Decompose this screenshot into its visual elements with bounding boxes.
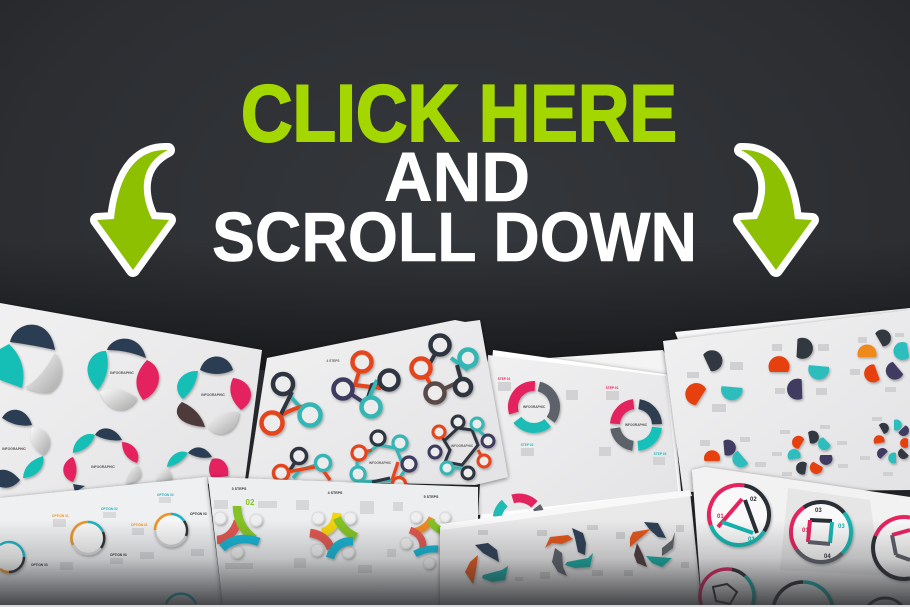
segmented ring: lower right bbox=[868, 598, 902, 606]
ring numbers: 02 bbox=[750, 497, 757, 503]
panel: petal sheet bbox=[0, 303, 262, 505]
half circle group: three bbox=[681, 347, 743, 406]
donut labels: STEP 03 bbox=[521, 443, 534, 447]
ring: first bbox=[0, 542, 24, 572]
ribbon titles bbox=[232, 487, 439, 507]
arrow group: three bbox=[465, 543, 508, 584]
petal diagram: six centre bbox=[63, 428, 141, 492]
petal diagram: four bbox=[88, 339, 159, 410]
option labels: OPTION 03 bbox=[31, 563, 48, 567]
text placeholders bbox=[53, 497, 204, 570]
panel: option circles sheet bbox=[0, 477, 223, 607]
half circle group: lower seven bbox=[787, 430, 832, 476]
panel: ribbon sheet bbox=[208, 477, 478, 607]
panel: back sheet with donuts bbox=[478, 350, 682, 551]
option labels: OPTION 01 bbox=[52, 514, 69, 518]
ring numbers: 03 bbox=[748, 537, 755, 543]
text placeholders bbox=[498, 382, 665, 465]
ribbon diagram: three bbox=[217, 506, 259, 548]
panel: half circles sheet bbox=[663, 308, 910, 492]
text placeholders bbox=[214, 500, 403, 573]
ring numbers: 04 bbox=[824, 554, 831, 560]
loop diagram: four rings bbox=[334, 352, 398, 416]
ring: third bbox=[155, 514, 187, 546]
loop diagram: three rings bbox=[262, 374, 320, 434]
ring numbers: 03 bbox=[815, 508, 822, 514]
partial donut bbox=[488, 489, 550, 551]
segmented ring: triangle bbox=[698, 474, 780, 556]
segmented ring: lower left bbox=[700, 569, 754, 605]
half circle group: lower eight bbox=[873, 420, 910, 464]
arrow group: five bbox=[630, 522, 675, 567]
small round icons bbox=[214, 512, 450, 568]
panel: arrows sheet bbox=[440, 490, 702, 607]
loop labels: 4 STEPS bbox=[326, 359, 340, 363]
petal diagram: three bbox=[0, 325, 62, 392]
title: click here: CLICK HERE bbox=[241, 69, 677, 159]
loop diagram: five rings bbox=[412, 336, 476, 402]
bottom edge bbox=[0, 605, 910, 607]
loop diagram: lower three rings bbox=[274, 448, 330, 480]
loop labels: INFOGRAPHIC bbox=[451, 444, 474, 448]
petal labels: INFOGRAPHIC bbox=[110, 371, 134, 375]
petal labels: INFOGRAPHIC bbox=[91, 465, 115, 469]
petal diagram: six left bbox=[0, 410, 50, 488]
loop labels: INFOGRAPHIC bbox=[369, 461, 392, 465]
ribbon titles: 3 STEPS bbox=[232, 487, 247, 491]
donut labels: STEP 03 bbox=[654, 452, 667, 456]
petal labels: INFOGRAPHIC bbox=[2, 447, 26, 451]
text placeholders bbox=[687, 333, 904, 476]
arrow labels bbox=[478, 525, 689, 581]
ribbon titles: 02 bbox=[246, 498, 255, 507]
donut labels: INFOGRAPHIC bbox=[625, 423, 648, 427]
option labels: OPTION 02 bbox=[157, 493, 174, 497]
petal diagram: seven bbox=[156, 447, 228, 482]
option labels: OPTION 03 bbox=[110, 553, 127, 557]
half circle group: five bbox=[858, 326, 910, 385]
ring numbers bbox=[717, 497, 845, 560]
loop diagram: eight rings bbox=[429, 416, 494, 479]
arrow group: four bbox=[545, 528, 593, 576]
option labels: OPTION 02 bbox=[101, 507, 118, 511]
ribbon titles: 4 STEPS bbox=[328, 491, 343, 495]
ring numbers: 01 bbox=[802, 528, 809, 534]
ribbon diagram: four bbox=[310, 513, 356, 558]
option labels: OPTION 03 bbox=[190, 512, 207, 516]
panel: segmented circles sheet bbox=[692, 467, 910, 607]
donut labels: STEP 01 bbox=[606, 386, 619, 390]
ring: fourth bbox=[166, 594, 196, 604]
donut labels: STEP 01 bbox=[498, 377, 511, 381]
donut chart: three segments bbox=[504, 377, 564, 437]
bottom fade bbox=[0, 520, 910, 605]
subtitle: scroll down: SCROLL DOWN bbox=[212, 198, 697, 276]
ring numbers: 01 bbox=[717, 514, 724, 520]
donut labels bbox=[498, 377, 667, 456]
segmented ring: square bbox=[779, 490, 863, 574]
segmented ring: pentagon bbox=[873, 517, 910, 579]
loop diagram: six rings bbox=[351, 431, 416, 490]
option labels bbox=[31, 493, 207, 567]
ribbon titles: 5 STEPS bbox=[424, 495, 439, 499]
subtitle: and: AND bbox=[384, 138, 530, 216]
donut chart: four segments bbox=[612, 401, 660, 449]
donut labels: INFOGRAPHIC bbox=[523, 405, 546, 409]
half circle group: lower three bbox=[704, 439, 748, 471]
ring numbers: 03 bbox=[838, 524, 845, 530]
ring: second bbox=[71, 522, 104, 554]
half circle group: four bbox=[768, 338, 829, 400]
icon: left arrow bbox=[97, 150, 169, 270]
petal labels bbox=[2, 371, 225, 469]
segmented ring: lower middle bbox=[774, 582, 832, 605]
panel: loop rings sheet bbox=[248, 320, 508, 490]
option labels: OPTION 01 bbox=[131, 523, 148, 527]
petal diagram: five bbox=[177, 356, 251, 434]
petal labels: INFOGRAPHIC bbox=[201, 393, 225, 397]
loop labels bbox=[326, 359, 474, 465]
ribbon diagram: five bbox=[410, 518, 447, 554]
icon: right arrow bbox=[740, 150, 812, 270]
shadow under sheets bbox=[0, 240, 910, 370]
